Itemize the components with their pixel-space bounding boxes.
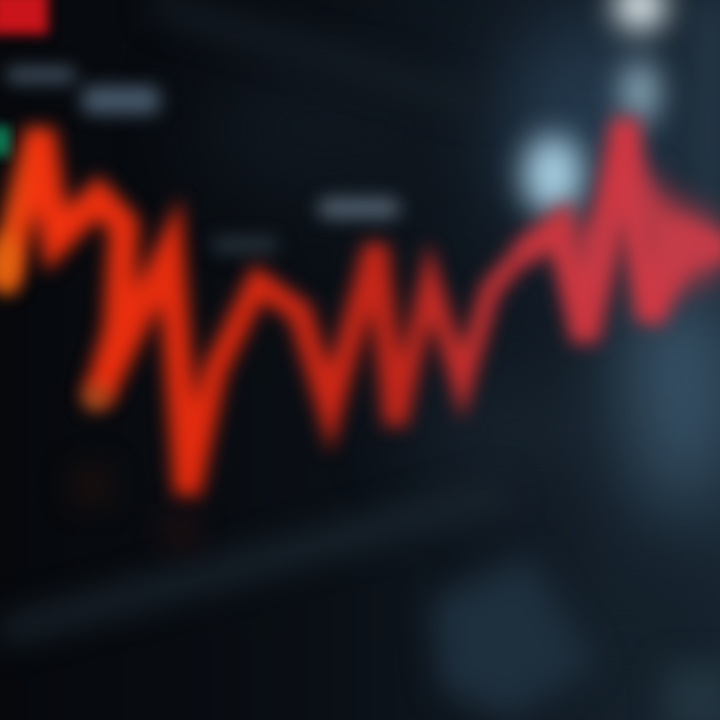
bright lights upper right (523, 0, 666, 215)
red line fill on right peaks (530, 170, 720, 320)
blue glow on right (200, 20, 720, 710)
orange accents on line (0, 235, 109, 411)
blurred label blobs (6, 68, 400, 252)
dim red shadow below line (74, 467, 194, 544)
red top-left marker (0, 0, 48, 34)
red market line (2, 120, 720, 495)
green marker (0, 126, 10, 156)
